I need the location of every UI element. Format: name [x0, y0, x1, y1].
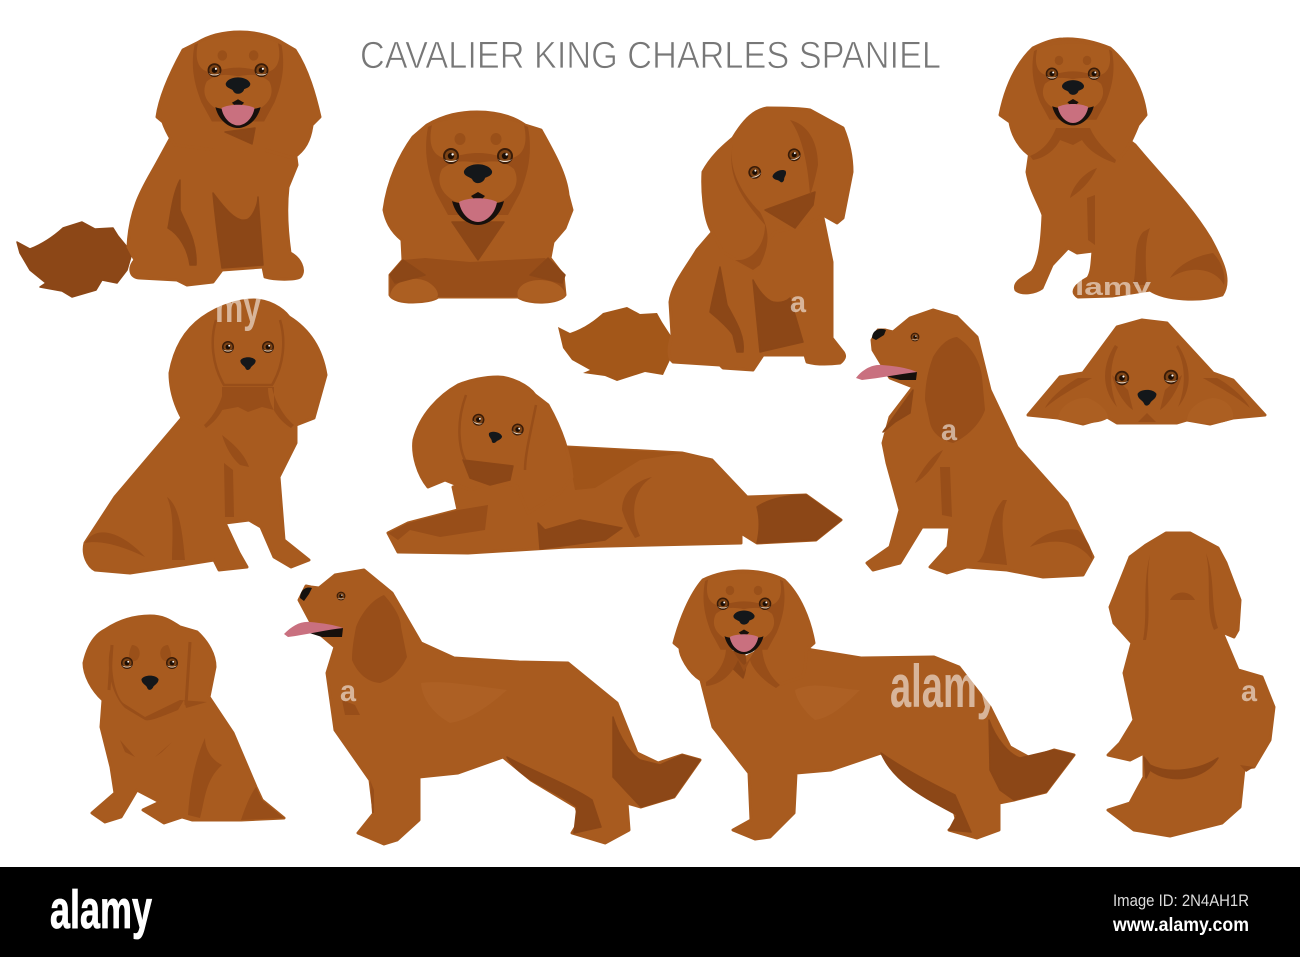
- dog 1: sitting front with tail: [17, 32, 320, 297]
- dog 7: profile sitting facing left with tongue: [856, 310, 1093, 577]
- watermark: central stamp: [215, 274, 1257, 720]
- dog 8: lying head on paws: [1028, 320, 1265, 424]
- dog 6: lying down to the right: [388, 377, 841, 553]
- title: CAVALIER KING CHARLES SPANIEL: [360, 35, 941, 77]
- dog 3: sitting with tilted head and tail: [558, 108, 852, 381]
- watermark: central stamp: lamy: [1075, 274, 1152, 301]
- dog 4: sitting three-quarter right: [1000, 39, 1226, 299]
- watermark: central stamp: my: [215, 283, 261, 332]
- dog 12: sitting seen from behind: [1108, 533, 1274, 836]
- dog 2: lying front view: [384, 112, 572, 302]
- dog 9: puppy sitting: [84, 616, 284, 823]
- dog 11: standing body with frontal face: [674, 571, 1074, 839]
- dog 10: standing profile facing left with tongue: [284, 570, 700, 844]
- image id: Image ID: 2N4AH1R: [1113, 891, 1249, 910]
- watermark: central stamp: a: [340, 675, 356, 708]
- watermark: central stamp: a: [790, 286, 806, 319]
- watermark: central stamp: alamy: [890, 653, 998, 720]
- url: www.alamy.com: [1112, 915, 1249, 936]
- footer logo: alamy: [50, 880, 152, 940]
- footer bar: [0, 867, 1300, 957]
- dog 5: sitting three-quarter left: [84, 300, 326, 573]
- watermark: central stamp: a: [941, 414, 957, 447]
- watermark: central stamp: a: [1241, 675, 1257, 708]
